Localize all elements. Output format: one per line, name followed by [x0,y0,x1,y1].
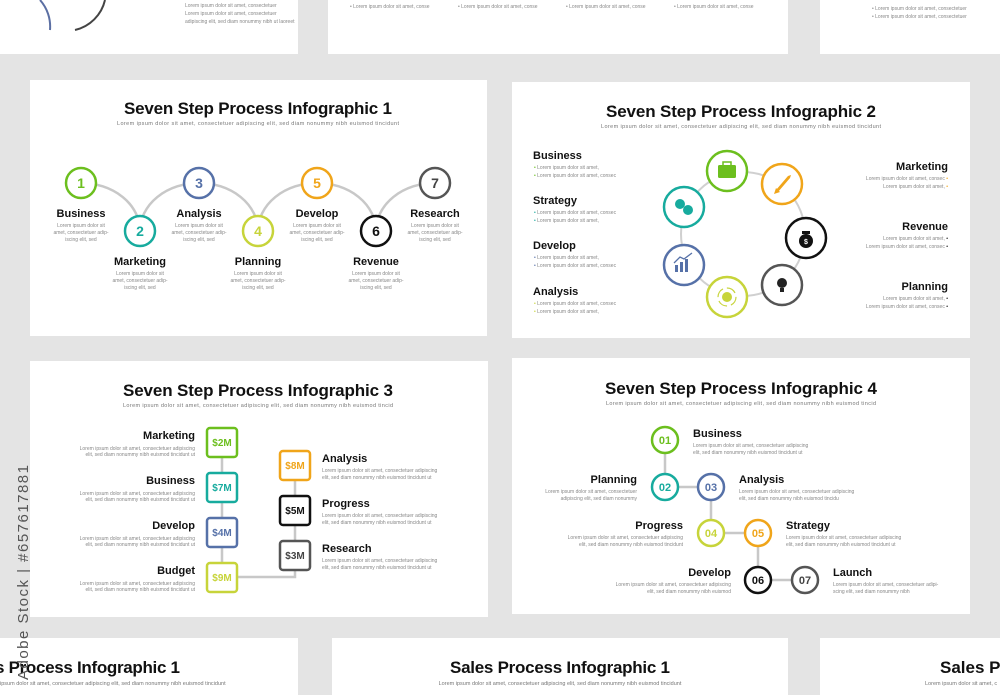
left labels 3: Lorem ipsum dolor sit amet, consectetuer adipiscing [80,581,195,587]
numbered circles: 05 [752,528,764,540]
background panels bottom [0,638,1000,695]
numbered circles: 02 [659,482,671,494]
right labels: Revenue [902,221,948,233]
icon circles [664,151,826,317]
labels 4: scing elit, sed diam nonummy nibh [833,589,910,595]
steps 1-7: 2 [136,223,144,239]
step labels [53,208,463,291]
step labels: iscing elit, sed [301,237,333,243]
left labels 3: elit, sed diam nonummy nibh euismod tincidunt ut [85,587,196,593]
background panels top: Lorem ipsum dolor sit amet, consectetuer [185,3,277,9]
left labels 3 [80,430,196,593]
left labels: • Lorem ipsum dolor sit amet, consec [534,301,617,307]
numbered circles: 01 [659,435,671,447]
right labels: Lorem ipsum dolor sit amet, • [883,236,948,242]
title 3: Seven Step Process Infographic 3 [123,381,393,400]
right labels 3: elit, sed diam nonummy nibh euismod tincidunt ut [322,565,432,571]
left labels: Business [533,150,582,162]
step labels: Lorem ipsum dolor sit [234,271,283,277]
step labels: Lorem ipsum dolor sit [411,223,460,229]
value boxes [207,428,310,592]
step labels: Lorem ipsum dolor sit [116,271,165,277]
labels 4: elit, sed diam nonummy nibh euismod tincidunt ut [693,450,803,456]
labels 4: Strategy [786,520,831,532]
left labels: Develop [533,240,576,252]
labels 4 [693,428,939,595]
panel 4 [512,358,970,614]
steps 1-7 [66,168,450,246]
labels 4 left [545,474,731,595]
left labels 3: elit, sed diam nonummy nibh euismod tincidunt ut [85,452,196,458]
step labels: amet, consectetuer adip- [112,278,168,284]
background panels top: • Lorem ipsum dolor sit amet, consectetuer [872,6,967,12]
left labels: • Lorem ipsum dolor sit amet, consec [534,210,617,216]
step labels: Lorem ipsum dolor sit [352,271,401,277]
background panels bottom: s Process Infographic 1 [0,658,180,677]
left labels: • Lorem ipsum dolor sit amet, consec [534,263,617,269]
right labels: Lorem ipsum dolor sit amet, consec • [866,244,948,250]
left labels 3: Lorem ipsum dolor sit amet, consectetuer adipiscing [80,536,195,542]
right labels [866,161,948,310]
labels 4: Launch [833,567,872,579]
step labels: iscing elit, sed [124,285,156,291]
title 2: Seven Step Process Infographic 2 [606,102,876,121]
right labels: Marketing [896,161,948,173]
numbered circles: 03 [705,482,717,494]
background panels bottom: Sales Process Infographic 1 [450,658,670,677]
right labels 3: Lorem ipsum dolor sit amet, consectetuer adipiscing [322,558,438,564]
numbered circles: 04 [705,528,718,540]
background panels top: • Lorem ipsum dolor sit amet, conse [566,4,646,10]
left labels 3: elit, sed diam nonummy nibh euismod tincidunt ut [85,542,196,548]
panel 1 [30,80,487,336]
title 1: Seven Step Process Infographic 1 [124,99,392,118]
background panels top: • Lorem ipsum dolor sit amet, conse [350,4,430,10]
value boxes: $4M [212,528,232,539]
staircase connector [665,440,805,580]
left labels 3: Budget [157,565,195,577]
labels 4: Analysis [739,474,784,486]
background panels top: • Lorem ipsum dolor sit amet, conse [674,4,754,10]
panel 3 [30,361,488,617]
left labels: • Lorem ipsum dolor sit amet, consec [534,173,617,179]
labels 4 left: Planning [591,474,637,486]
watermark side text: Adobe Stock | #657617881 [15,465,32,680]
step labels: Lorem ipsum dolor sit [175,223,224,229]
left labels: Strategy [533,195,578,207]
left labels: • Lorem ipsum dolor sit amet, [534,255,599,261]
step labels: Revenue [353,256,399,268]
right labels 3 [322,453,438,571]
panel 2: Lorem ipsum dolor sit amet, consectetuer adipiscing elit, sed diam nonummy nibh euismod tincidunt [601,124,881,130]
labels 4 left: elit, sed diam nonummy nibh euismod [647,589,731,595]
right labels: Lorem ipsum dolor sit amet, • [883,296,948,302]
step labels: iscing elit, sed [183,237,215,243]
value boxes: $5M [285,506,305,517]
step labels: iscing elit, sed [65,237,97,243]
labels 4 left: elit, sed diam nonummy nibh euismod tincidunt [579,542,684,548]
labels 4 left: Progress [635,520,683,532]
left labels: Analysis [533,286,578,298]
background panels top: adipiscing elit, sed diam nonummy nibh ut laoreet [185,19,295,25]
value boxes: $7M [212,483,232,494]
step labels: iscing elit, sed [360,285,392,291]
right labels 3: elit, sed diam nonummy nibh euismod tincidunt ut [322,475,432,481]
panel 3: Lorem ipsum dolor sit amet, consectetuer adipiscing elit, sed diam nonummy nibh euismod tincid [123,403,393,409]
step labels: Marketing [114,256,166,268]
icon circles: $ [804,239,808,246]
labels 4: Business [693,428,742,440]
left labels: • Lorem ipsum dolor sit amet, [534,309,599,315]
left labels: • Lorem ipsum dolor sit amet, [534,218,599,224]
step labels: Research [410,208,460,220]
right labels 3: Lorem ipsum dolor sit amet, consectetuer adipiscing [322,513,438,519]
panel 2 [512,82,970,338]
labels 4 left: adipiscing elit, sed diam nonummy [561,496,637,502]
labels 4: Lorem ipsum dolor sit amet, consectetuer adipiscing [786,535,902,541]
step labels: Lorem ipsum dolor sit [293,223,342,229]
left labels [533,150,617,315]
steps 1-7: 7 [431,175,439,191]
left labels 3: Lorem ipsum dolor sit amet, consectetuer adipiscing [80,491,195,497]
steps 1-7: 5 [313,175,321,191]
step labels: Planning [235,256,281,268]
left labels 3: Marketing [143,430,195,442]
steps 1-7: 6 [372,223,380,239]
step labels: Business [57,208,105,220]
panel 4: Lorem ipsum dolor sit amet, consectetuer adipiscing elit, sed diam nonummy nibh euismod tincid [606,401,876,407]
step labels: Develop [296,208,339,220]
right labels: Planning [902,281,948,293]
labels 4 left: Develop [688,567,731,579]
labels 4: Lorem ipsum dolor sit amet, consectetuer adipiscing [693,443,809,449]
right labels 3: Research [322,543,372,555]
left labels 3: Lorem ipsum dolor sit amet, consectetuer adipiscing [80,446,195,452]
connectors [222,442,295,577]
right labels 3: Progress [322,498,370,510]
step labels: Lorem ipsum dolor sit [57,223,106,229]
left labels: • Lorem ipsum dolor sit amet, [534,165,599,171]
labels 4: Lorem ipsum dolor sit amet, consectetuer adipiscing [739,489,855,495]
value boxes: $8M [285,461,305,472]
step labels: iscing elit, sed [242,285,274,291]
left labels 3: Business [146,475,195,487]
steps 1-7: 1 [77,175,85,191]
labels 4: elit, sed diam nonummy nibh euismod tincidunt ut [786,542,896,548]
step labels: amet, consectetuer adip- [289,230,345,236]
background panels top: Lorem ipsum dolor sit amet, consectetuer [185,11,277,17]
step labels: amet, consectetuer adip- [53,230,109,236]
value boxes: $3M [285,551,305,562]
right labels: Lorem ipsum dolor sit amet, consec • [866,304,948,310]
step labels: iscing elit, sed [419,237,451,243]
step labels: amet, consectetuer adip- [407,230,463,236]
numbered circles [652,427,818,593]
numbered circles: 07 [799,575,811,587]
right labels: Lorem ipsum dolor sit amet, • [883,184,948,190]
right labels 3: elit, sed diam nonummy nibh euismod tincidunt ut [322,520,432,526]
labels 4 left: Lorem ipsum dolor sit amet, consectetuer adipiscing [568,535,683,541]
wave connector [81,183,435,231]
value boxes: $2M [212,438,232,449]
panel 1: Lorem ipsum dolor sit amet, consectetuer adipiscing elit, sed diam nonummy nibh euismod tincidunt [117,121,399,127]
right labels 3: Lorem ipsum dolor sit amet, consectetuer adipiscing [322,468,438,474]
background panels top: • Lorem ipsum dolor sit amet, conse [458,4,538,10]
steps 1-7: 3 [195,175,203,191]
value boxes: $9M [212,573,232,584]
right labels 3: Analysis [322,453,367,465]
numbered circles: 06 [752,575,764,587]
background panels bottom: Lorem ipsum dolor sit amet, consectetuer adipiscing elit, sed diam nonummy nibh euismod tincidunt [439,681,682,687]
left labels 3: elit, sed diam nonummy nibh euismod tincidunt ut [85,497,196,503]
step labels: Analysis [176,208,222,220]
title 4: Seven Step Process Infographic 4 [605,379,878,398]
step labels: amet, consectetuer adip- [348,278,404,284]
steps 1-7: 4 [254,223,262,239]
background panels top: • Lorem ipsum dolor sit amet, consectetuer [872,14,967,20]
step labels: amet, consectetuer adip- [171,230,227,236]
background panels bottom: Lorem ipsum dolor sit amet, c [925,681,997,687]
left labels 3: Develop [152,520,195,532]
right labels: Lorem ipsum dolor sit amet, consec • [866,176,948,182]
labels 4: Lorem ipsum dolor sit amet, consectetuer adipi- [833,582,939,588]
labels 4 left: Lorem ipsum dolor sit amet, consectetuer [545,489,637,495]
background panels bottom: ipsum dolor sit amet, consectetuer adipiscing elit, sed diam nonummy nibh euismod tincidunt [0,681,226,687]
ring [681,172,805,296]
step labels: amet, consectetuer adip- [230,278,286,284]
background panels top [0,0,1000,54]
labels 4 left: Lorem ipsum dolor sit amet, consectetuer adipiscing [616,582,731,588]
labels 4: elit, sed diam nonummy nibh euismod tincidu [739,496,839,502]
